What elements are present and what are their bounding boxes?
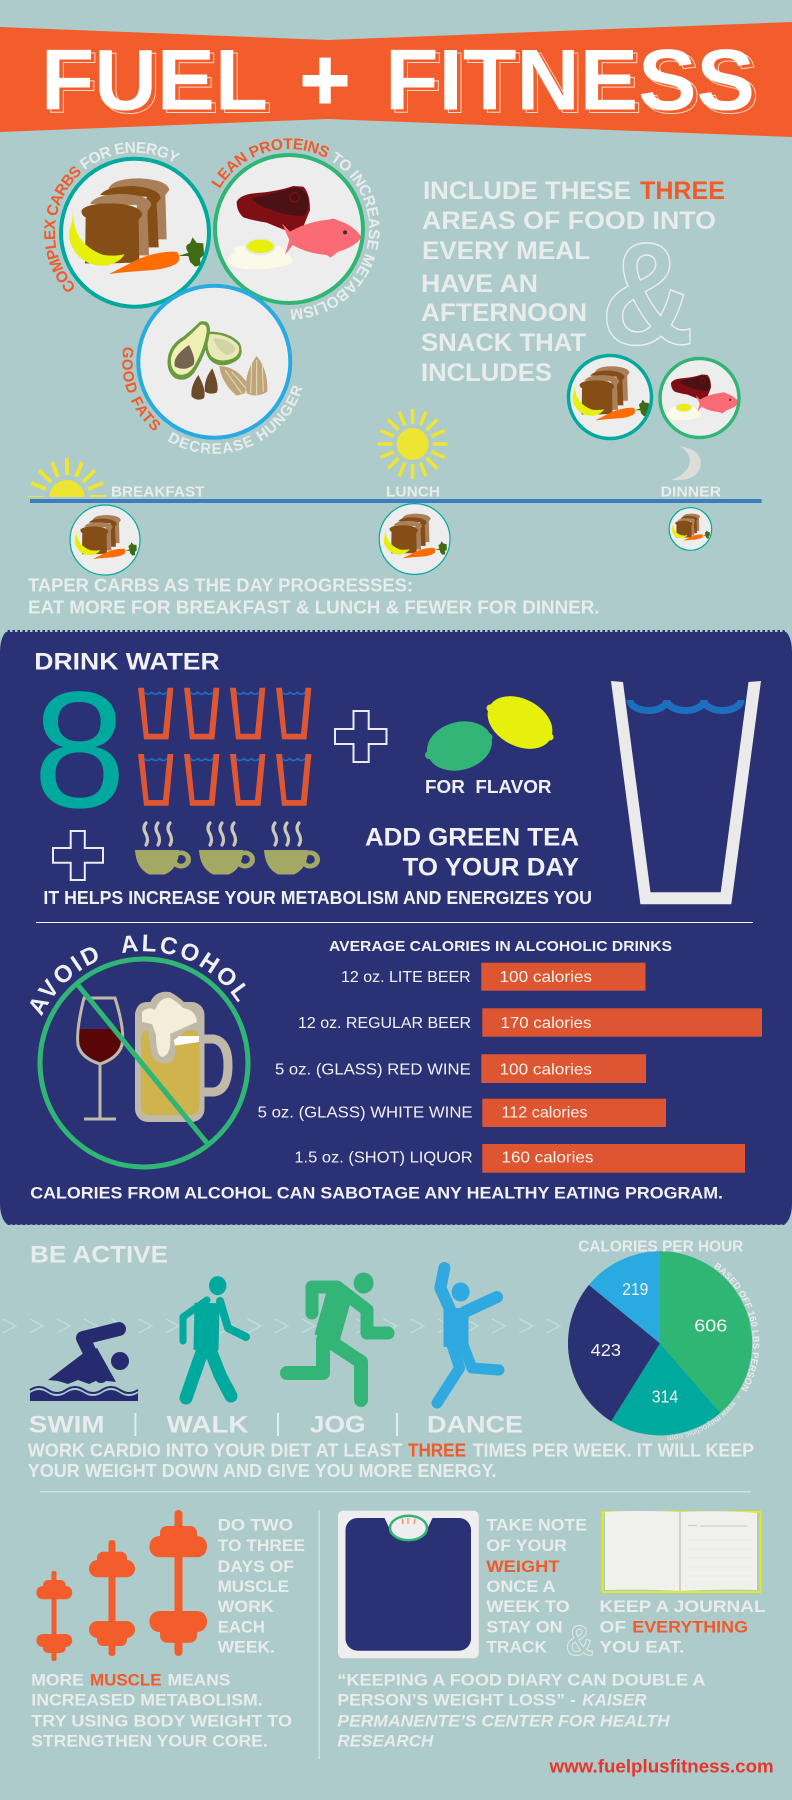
- pie title: CALORIES PER HOUR: [578, 1239, 744, 1256]
- row: regular beer: [298, 1008, 762, 1037]
- text: muscle work: DO TWO: [218, 1516, 293, 1535]
- text: taper carbs: EAT MORE FOR BREAKFAST & LUNCH & FEWER FOR DINNER.: [28, 598, 600, 618]
- pie values: 219: [622, 1279, 648, 1299]
- title text: FITNESS: [385, 32, 755, 128]
- title text: FUEL: [41, 32, 268, 128]
- row: lite beer: [341, 963, 646, 991]
- text: quote: PERSON’S WEIGHT LOSS” -: [337, 1691, 576, 1710]
- text: take note: WEIGHT: [486, 1557, 560, 1576]
- text: take note: OF YOUR: [486, 1536, 567, 1555]
- lunch carbs: [379, 504, 450, 574]
- icon: journal: [602, 1511, 760, 1592]
- text: take note: ONCE A: [486, 1577, 556, 1596]
- icon: dancer: [437, 1268, 499, 1403]
- pie values: 606: [694, 1316, 727, 1336]
- pie values: [591, 1279, 727, 1406]
- text: include three areas: [421, 177, 725, 387]
- small ampersand outline: &: [566, 1617, 593, 1665]
- icon: medium dumbbell: [89, 1540, 135, 1656]
- row: white wine: 112 calories: [502, 1105, 587, 1122]
- slice 314: [611, 1343, 720, 1435]
- icon: large glass: [611, 681, 761, 904]
- icon: walker: [183, 1276, 246, 1398]
- title text: [41, 32, 755, 128]
- text: keep a journal: KEEP A JOURNAL: [600, 1597, 766, 1616]
- breakfast carbs: [70, 505, 140, 575]
- bar chart: calories in alcoholic drinks: [258, 938, 762, 1173]
- text: include three areas: AFTERNOON: [421, 299, 587, 327]
- text: include three areas: EVERY MEAL: [422, 237, 590, 265]
- pie values: 423: [591, 1340, 621, 1360]
- icon: lime and lemon: [421, 686, 561, 778]
- text: green tea: TO YOUR DAY: [402, 854, 579, 882]
- chart title: AVERAGE CALORIES IN ALCOHOLIC DRINKS: [329, 938, 672, 955]
- title outline: FUEL: [45, 36, 272, 132]
- text: include three areas: HAVE AN: [421, 270, 538, 298]
- dinner carbs: [669, 508, 712, 550]
- prohibition sign: [40, 959, 248, 1167]
- text: more muscle: MUSCLE: [90, 1671, 162, 1690]
- pie values: 314: [652, 1386, 679, 1406]
- text: more muscle: [31, 1671, 292, 1751]
- dinner label: DINNER: [661, 485, 722, 501]
- text: alcohol warning: CALORIES FROM ALCOHOL CAN SABOTAGE ANY HEALTHY EATING PROGRAM.: [30, 1184, 723, 1203]
- title banner: [0, 22, 792, 137]
- icon: wine glass: [78, 998, 123, 1119]
- text: cardio: WORK CARDIO INTO YOUR DIET AT LEAST: [28, 1441, 402, 1461]
- text: include three areas: INCLUDE THESE: [423, 177, 631, 205]
- lunch label: LUNCH: [386, 485, 440, 501]
- row: lite beer: 12 oz. LITE BEER: [341, 969, 471, 986]
- title text: +: [300, 32, 350, 128]
- text: more muscle: MORE: [31, 1671, 84, 1690]
- text: include three areas: SNACK THAT: [421, 329, 586, 357]
- text: keep a journal: [600, 1597, 766, 1657]
- row: red wine: 100 calories: [500, 1061, 592, 1078]
- row: red wine: 5 oz. (GLASS) RED WINE: [275, 1061, 471, 1078]
- icon: noon sun: [378, 409, 448, 479]
- text: cardio: YOUR WEIGHT DOWN AND GIVE YOU MORE ENERGY.: [28, 1461, 497, 1481]
- title outline: [45, 36, 759, 132]
- lean proteins circle: LEAN PROTEINS TO INCREASE METABOLISM: [211, 138, 380, 320]
- good fats circle: [122, 284, 303, 454]
- text: keep a journal: YOU EAT.: [600, 1638, 684, 1657]
- text: take note: WEEK TO: [486, 1597, 570, 1616]
- row: white wine: 5 oz. (GLASS) WHITE WINE: [258, 1105, 473, 1122]
- icon: sunrise: [28, 458, 106, 497]
- icon: bathroom scale: [338, 1511, 479, 1658]
- text: muscle work: WEEK.: [218, 1638, 275, 1657]
- text: muscle work: DAYS OF: [218, 1557, 294, 1576]
- snack protein icon: [658, 357, 741, 439]
- activity labels: DANCE: [427, 1411, 523, 1438]
- slice 219: [589, 1251, 660, 1343]
- icon: jogger: [287, 1272, 388, 1400]
- text: take note: [486, 1516, 587, 1657]
- pie chart: calories per hour: BASED OFF 160 LBS PERSON - www.mayoclinic.com: [667, 1262, 760, 1440]
- activity labels: SWIM: [29, 1411, 104, 1438]
- text: keep a journal: OF: [600, 1618, 626, 1637]
- text: cardio: TIMES PER WEEK. IT WILL KEEP: [473, 1441, 754, 1461]
- text: more muscle: INCREASED METABOLISM.: [31, 1691, 263, 1710]
- text: quote: RESEARCH: [337, 1732, 434, 1751]
- text: muscle work: MUSCLE: [218, 1577, 289, 1596]
- text: more muscle: STRENGTHEN YOUR CORE.: [31, 1732, 268, 1751]
- icon: beer mug: [135, 992, 228, 1122]
- icon: plus: [53, 831, 103, 880]
- text: muscle work: WORK: [218, 1597, 274, 1616]
- icon: small dumbbell: [36, 1571, 72, 1661]
- activity labels: [29, 1411, 523, 1438]
- pie chart: calories per hour: [568, 1239, 760, 1440]
- icon: swimmer: [30, 1329, 138, 1401]
- icon: plus: [335, 711, 386, 762]
- icon: green tea cups: [135, 823, 320, 874]
- icon: eight glasses: [138, 688, 311, 806]
- good fats circle: GOOD FATS: [122, 348, 160, 430]
- avoid alcohol icon: [30, 934, 250, 1170]
- row: lite beer: 100 calories: [500, 969, 592, 986]
- activity labels: JOG: [310, 1411, 366, 1438]
- avoid alcohol icon: AVOID ALCOHOL: [30, 934, 246, 1016]
- timeline: [30, 485, 762, 503]
- row: regular beer: 12 oz. REGULAR BEER: [298, 1015, 471, 1032]
- panel: water and alcohol: [0, 630, 792, 1225]
- text: keep a journal: EVERYTHING: [632, 1618, 748, 1637]
- activity labels: WALK: [167, 1411, 249, 1438]
- text: for flavor: FOR FLAVOR: [425, 777, 552, 797]
- row: liquor: 160 calories: [502, 1149, 593, 1166]
- website link text: www.fuelplusfitness.com: [548, 1756, 774, 1776]
- text: muscle work: EACH: [218, 1618, 265, 1637]
- text: more muscle: TRY USING BODY WEIGHT TO: [31, 1712, 292, 1731]
- text: muscle work: TO THREE: [218, 1536, 305, 1555]
- text: take note: STAY ON: [486, 1618, 563, 1637]
- number eight: 8: [33, 658, 126, 843]
- text: quote: [337, 1671, 706, 1751]
- row: white wine: [258, 1099, 666, 1127]
- title outline: FITNESS: [389, 36, 759, 132]
- text: quote: KAISER: [582, 1691, 647, 1710]
- row: liquor: 1.5 oz. (SHOT) LIQUOR: [294, 1149, 473, 1166]
- icon: moon: [671, 446, 701, 480]
- text: take note: TRACK: [486, 1638, 548, 1657]
- ampersand outline: &: [601, 212, 694, 375]
- slice 423: [568, 1285, 660, 1421]
- snack carbs icon: [567, 354, 653, 440]
- text: include three areas: INCLUDES: [421, 359, 552, 387]
- icon: large dumbbell: [150, 1510, 207, 1656]
- text: take note: TAKE NOTE: [486, 1516, 587, 1535]
- row: red wine: [275, 1054, 646, 1083]
- text: quote: “KEEPING A FOOD DIARY CAN DOUBLE A: [337, 1671, 706, 1690]
- pie source note: [667, 1267, 753, 1436]
- row: regular beer: 170 calories: [500, 1015, 591, 1032]
- text: taper carbs: TAPER CARBS AS THE DAY PROGRESSES:: [28, 576, 413, 596]
- text: cardio: [28, 1441, 754, 1481]
- text: include three areas: AREAS OF FOOD INTO: [422, 207, 716, 235]
- heading: be active: BE ACTIVE: [30, 1241, 168, 1268]
- complex carbs circle: COMPLEX CARBS FOR ENERGY: [44, 142, 180, 292]
- curved label: [42, 951, 238, 1017]
- text: green tea: [365, 824, 579, 882]
- text: cardio: THREE: [408, 1441, 466, 1461]
- heading: drink water: DRINK WATER: [34, 648, 220, 675]
- text: taper carbs: [28, 576, 600, 618]
- slice 606: [660, 1251, 752, 1413]
- text: metabolism: IT HELPS INCREASE YOUR METABOLISM AND ENERGIZES YOU: [43, 888, 592, 908]
- good fats circle: DECREASE HUNGER: [168, 386, 303, 454]
- text: quote: PERMANENTE’S CENTER FOR HEALTH: [337, 1712, 670, 1731]
- row: liquor: [294, 1144, 745, 1173]
- text: more muscle: MEANS: [168, 1671, 230, 1690]
- text: include three areas: THREE: [640, 177, 725, 205]
- breakfast label: BREAKFAST: [111, 485, 205, 501]
- text: green tea: ADD GREEN TEA: [365, 824, 579, 852]
- text: muscle work: [218, 1516, 305, 1657]
